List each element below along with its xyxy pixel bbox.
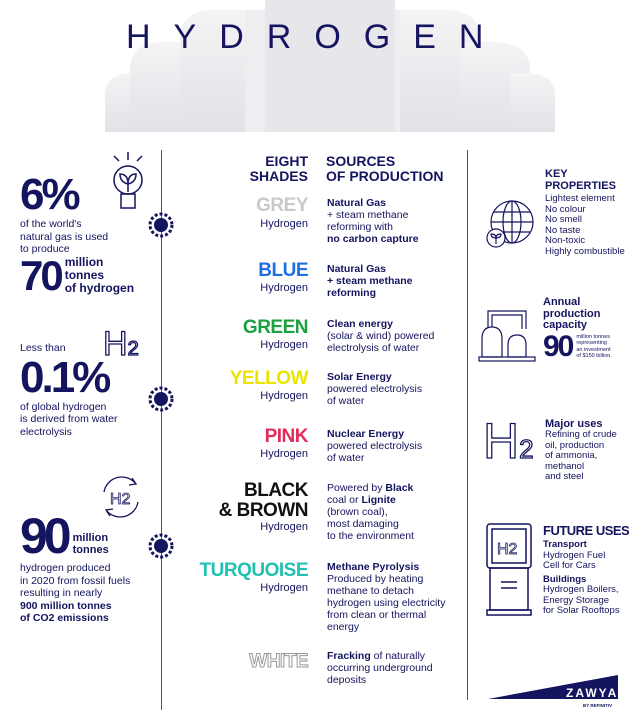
stat: 6%: million	[65, 255, 103, 269]
future uses: FUTURE USES	[543, 523, 629, 538]
future uses: Transport	[543, 539, 587, 550]
icon: H2: H2	[103, 325, 139, 363]
logo: zawya	[488, 675, 618, 708]
future uses: for Solar Rooftops	[543, 605, 620, 616]
key properties: PROPERTIES	[545, 180, 616, 192]
key properties: KEY	[545, 168, 568, 180]
text: + steam methane	[327, 209, 408, 221]
text: + steam methane	[327, 275, 412, 287]
stat: 6%: natural gas is used	[20, 230, 108, 242]
text: most damaging	[327, 518, 399, 530]
text: energy	[327, 621, 359, 633]
text: of water	[327, 395, 364, 407]
stat: 6%	[20, 170, 134, 298]
stat: 6%: to produce	[20, 243, 70, 255]
text: to the environment	[327, 530, 414, 542]
future uses: Buildings	[543, 574, 586, 584]
stat: 90 million tonnes: in 2020 from fossil fuels	[20, 574, 130, 586]
annual production capacity: representing	[576, 340, 607, 346]
shade: black & brown: & BROWN	[219, 500, 308, 521]
key properties	[545, 168, 625, 256]
shade: pink: PINK	[265, 426, 308, 447]
key properties: Non-toxic	[545, 235, 585, 246]
icon: plant	[478, 310, 536, 362]
key properties: No smell	[545, 214, 582, 225]
text: of water	[327, 452, 364, 464]
header: sources: SOURCES	[326, 153, 395, 169]
text: Hydrogen	[260, 582, 308, 594]
major uses: oil, production	[545, 440, 604, 450]
header: sources	[326, 153, 443, 184]
text: Hydrogen	[260, 521, 308, 533]
header: eight shades: EIGHT	[265, 153, 308, 169]
gear icons	[148, 212, 174, 238]
shade: black & brown	[219, 480, 308, 521]
stat: 90 million tonnes: resulting in nearly	[20, 587, 102, 599]
icon: fuel station	[486, 523, 532, 616]
key properties: Highly combustible	[545, 246, 625, 256]
stat: 90 million tonnes	[20, 508, 130, 624]
text: Hydrogen	[260, 218, 308, 230]
text: coal or Lignite	[327, 494, 396, 506]
key properties: No taste	[545, 224, 580, 236]
text: Clean energy	[327, 318, 393, 330]
background tanks	[105, 0, 555, 132]
title: HYDROGEN	[126, 18, 506, 56]
header: eight shades	[250, 153, 308, 184]
stat: 0.1%: 0.1%	[20, 352, 108, 402]
stat: 90 million tonnes: hydrogen produced	[20, 562, 110, 574]
logo: zawya: ZAWYA	[566, 686, 618, 700]
text: Hydrogen	[260, 448, 308, 460]
major uses: and steel	[545, 471, 584, 482]
key properties: No colour	[545, 204, 586, 214]
stat: 90 million tonnes: million	[73, 532, 108, 544]
text: Powered by Black	[327, 482, 413, 494]
icon: H2 cycle	[103, 476, 139, 518]
annual production capacity: of $150 billion.	[576, 353, 612, 359]
future uses: Hydrogen Fuel	[543, 550, 605, 560]
text: methane to detach	[327, 585, 414, 597]
annual production capacity: an investment	[576, 346, 611, 352]
text: deposits	[327, 674, 366, 686]
stat: 6%: 6%	[20, 170, 78, 219]
text: Produced by heating	[327, 573, 423, 585]
stat: 6%: tonnes	[65, 268, 104, 282]
text: Hydrogen	[260, 339, 308, 351]
text: Hydrogen	[260, 390, 308, 402]
text: Nuclear Energy	[327, 428, 404, 440]
major uses: Major uses	[545, 418, 602, 430]
text: powered electrolysis	[327, 440, 422, 452]
text: Methane Pyrolysis	[327, 561, 419, 573]
future uses	[543, 523, 630, 616]
header: eight shades: SHADES	[250, 168, 308, 184]
annual production capacity	[543, 296, 612, 362]
annual production capacity: Annual	[543, 296, 580, 308]
text: Natural Gas	[327, 197, 386, 209]
text: reforming	[327, 287, 376, 299]
icon: H2 large: H2	[483, 413, 534, 469]
major uses	[545, 418, 617, 482]
text: (solar & wind) powered	[327, 330, 434, 342]
shade: turquoise: TURQUOISE	[200, 560, 308, 581]
text: electrolysis of water	[327, 342, 419, 354]
stat: 0.1%: of global hydrogen	[20, 400, 106, 412]
text: (brown coal),	[327, 506, 388, 518]
stat: 90 million tonnes: 900 million tonnes	[20, 600, 112, 612]
stat: 0.1%	[20, 342, 118, 438]
stat: 0.1%: electrolysis	[20, 426, 72, 438]
icon: globe	[486, 200, 534, 248]
major uses: methanol	[545, 460, 584, 472]
shade: green: GREEN	[243, 317, 308, 338]
text: powered electrolysis	[327, 383, 422, 395]
text: occurring underground	[327, 662, 433, 674]
stat: 6%: of hydrogen	[65, 281, 134, 295]
future uses: Cell for Cars	[543, 560, 596, 571]
text: reforming with	[327, 221, 393, 233]
icon: fuel station: H2	[497, 541, 518, 558]
future uses: Hydrogen Boilers,	[543, 584, 619, 595]
icon: lightbulb	[113, 152, 143, 209]
text: no carbon capture	[327, 233, 419, 245]
shade: black & brown: BLACK	[244, 480, 308, 501]
annual production capacity: million tonnes	[576, 334, 610, 340]
text: Hydrogen	[260, 282, 308, 294]
annual production capacity: 90	[543, 330, 572, 362]
stat: 6%: 70	[20, 252, 61, 298]
stat: 90 million tonnes: 90	[20, 508, 68, 564]
major uses: Refining of crude	[545, 429, 617, 440]
stat: 90 million tonnes: of CO2 emissions	[20, 612, 109, 624]
divider lines	[161, 150, 162, 710]
key properties: Lightest element	[545, 193, 615, 204]
text: Solar Energy	[327, 371, 392, 383]
text: from clean or thermal	[327, 609, 426, 621]
header: sources: OF PRODUCTION	[326, 168, 443, 184]
shade: white: WHITE	[249, 651, 308, 672]
stat: 0.1%: Less than	[20, 342, 66, 354]
annual production capacity: production	[543, 308, 600, 320]
logo: zawya: BY REFINITIV	[583, 703, 612, 708]
future uses: Energy Storage	[543, 594, 609, 606]
major uses: of ammonia,	[545, 450, 597, 461]
annual production capacity: capacity	[543, 319, 587, 331]
stat: 6%: of the world's	[20, 218, 82, 230]
icon: H2 cycle: H2	[110, 491, 131, 508]
text: Fracking of naturally	[327, 650, 425, 662]
shade: blue: BLUE	[258, 260, 308, 281]
text: hydrogen using electricity	[327, 597, 445, 609]
stat: 0.1%: is derived from water	[20, 413, 117, 425]
stat: 90 million tonnes: tonnes	[73, 544, 109, 556]
shade: yellow: YELLOW	[230, 368, 308, 389]
shade: grey: GREY	[256, 195, 308, 216]
text: Natural Gas	[327, 263, 386, 275]
